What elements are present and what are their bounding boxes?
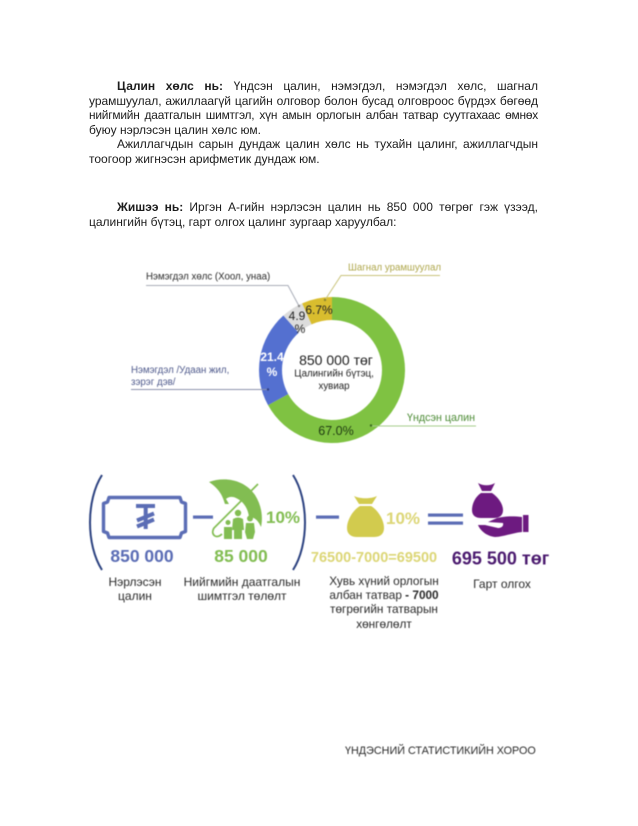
- icon: purple money bag and hand: [472, 483, 528, 537]
- callout: additional wage: [146, 272, 300, 307]
- donut chart: [259, 297, 405, 443]
- label: income tax: хөнгөлөлт: [356, 617, 412, 631]
- value: 4.9%: %: [295, 322, 306, 336]
- callout: additional pay: зэрэг дэв/: [131, 377, 176, 388]
- slice: additional pay 21.4%: [259, 316, 299, 405]
- icon: umbrella and family: [209, 479, 262, 539]
- text block: salary definition: [89, 79, 538, 166]
- value: 85 000: 85 000: [214, 546, 268, 566]
- left bracket: [90, 475, 102, 570]
- equals sign: [428, 514, 463, 525]
- icon: banknote: [104, 498, 186, 538]
- donut centre label: Цалингийн бүтэц,: [294, 368, 374, 380]
- label: 10% green: 10%: [266, 508, 300, 527]
- icon: yellow money bag: [347, 496, 384, 537]
- slice: bonus 6.7%: [302, 297, 332, 324]
- slice: additional wage 4.9%: [283, 303, 312, 333]
- text block: example: цалингийн бүтэц, гарт олгох цалинг зургаар харуулбал:: [89, 215, 396, 229]
- text block: salary definition: урамшуулал, ажиллаагүй цагийн олговор болон бусад олговроос бүрдэх бөгөөд: [89, 94, 538, 108]
- slice: basic salary 67.0%: [268, 297, 405, 443]
- label: income tax: төгрөгийн татварын: [330, 602, 438, 616]
- minus sign 1: [193, 516, 213, 519]
- value: 6.7%: 6.7%: [305, 303, 333, 317]
- callout: basic salary: Үндсэн цалин: [407, 412, 475, 424]
- value: net pay: 695 500 төг: [452, 548, 550, 568]
- right bracket: [293, 475, 305, 570]
- text block: salary definition: Ажиллагчдын сарын дундаж цалин хөлс нь тухайн цалинг, ажиллагчдын: [117, 137, 538, 151]
- value: 21.4%: %: [267, 365, 278, 379]
- donut centre label: [294, 352, 374, 392]
- family figures: [235, 510, 241, 516]
- callout: bonus: [324, 262, 441, 301]
- callout: additional pay: [131, 365, 269, 391]
- value: 4.9%: 4.9: [289, 309, 305, 323]
- value: tax calculation: 76500-7000=69500: [311, 550, 437, 566]
- callout: basic salary: [370, 412, 476, 427]
- text block: example: Жишээ нь: Иргэн А-гийн нэрлэсэн цалин нь 850 000 төгрөг гэж үзээд,: [117, 200, 538, 214]
- text block: salary definition: Цалин хөлс нь: Үндсэн цалин, нэмэгдэл, нэмэгдэл хөлс, шагнал: [117, 79, 538, 93]
- minus sign 2: [316, 516, 339, 519]
- value: 21.4%: 21.4: [260, 350, 284, 364]
- label: social insurance: Нийгмийн даатгалын: [184, 575, 300, 589]
- label: income tax: албан татвар - 7000: [329, 588, 439, 602]
- callout: bonus: Шагнал урамшуулал: [348, 262, 441, 274]
- label: take-home: Гарт олгох: [473, 577, 531, 591]
- text block: example: [89, 200, 538, 229]
- text block: salary definition: нийгмийн даатгалын шимтгэл, хүн амын орлогын албан татвар суутгахаас өмнөх: [89, 108, 538, 122]
- label: income tax: Хувь хүний орлогын: [329, 574, 439, 588]
- donut centre label: хувиар: [318, 381, 350, 392]
- label: gross salary: Нэрлэсэн: [108, 575, 162, 589]
- value: 67.0%: 67.0%: [318, 424, 354, 438]
- text block: salary definition: тоогоор жигнэсэн арифметик дундаж юм.: [89, 152, 320, 166]
- text block: salary definition: буюу нэрлэсэн цалин хөлс юм.: [89, 123, 261, 137]
- label: gross salary: цалин: [118, 589, 152, 603]
- label: 10% yellow: 10%: [386, 509, 420, 528]
- footer: ҮНДЭСНИЙ СТАТИСТИКИЙН ХОРОО: [345, 744, 536, 757]
- donut centre label: 850 000 төг: [299, 352, 373, 368]
- callout: additional wage: Нэмэгдэл хөлс (Хоол, унаа): [146, 272, 270, 282]
- label: social insurance: шимтгэл төлөлт: [198, 589, 287, 603]
- value: 850 000: 850 000: [110, 546, 174, 566]
- callout: additional pay: Нэмэгдэл /Удаан жил,: [131, 365, 229, 376]
